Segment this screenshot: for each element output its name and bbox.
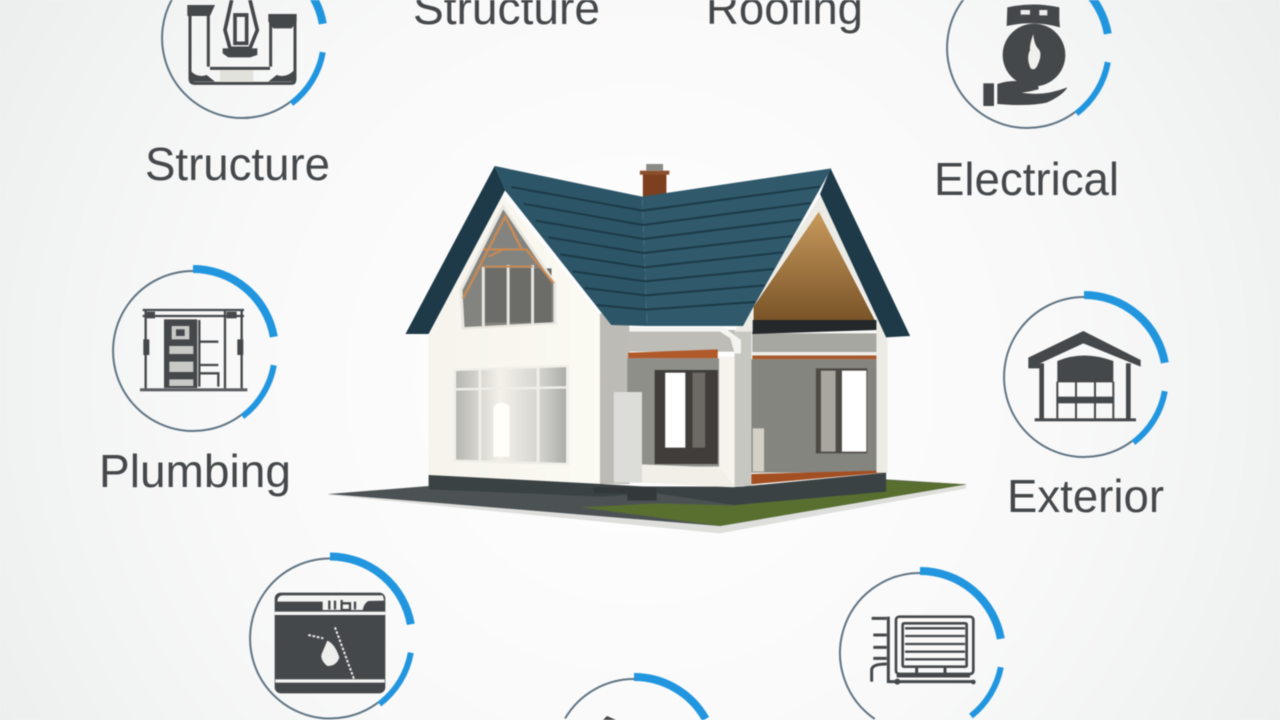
main left facade <box>429 193 601 485</box>
panel: bottom centre <box>565 677 706 720</box>
utility door <box>614 392 642 483</box>
upper window with rafters <box>461 207 555 328</box>
open room floor <box>751 471 884 484</box>
ring: hvac <box>840 571 1001 719</box>
icon: bottom centre fragment <box>603 716 616 720</box>
ring: plumbing <box>113 269 274 431</box>
ring: electrical <box>947 0 1108 128</box>
panel: exterior <box>1004 295 1165 522</box>
icon: screen with drop <box>275 593 385 693</box>
left gable roof edge <box>405 166 505 334</box>
beam and ceiling band <box>752 320 876 359</box>
icon: plumbing cabinet <box>140 310 247 391</box>
panel: electrical <box>934 0 1119 205</box>
gutter and downpipe <box>629 327 741 353</box>
vaulted ceiling <box>754 212 875 320</box>
entry steps <box>594 487 657 501</box>
porch back wall <box>627 358 720 467</box>
right roof plane <box>642 168 831 326</box>
lower porch wall <box>642 464 735 487</box>
icon: hand holding energy <box>983 4 1067 106</box>
label: exterior: Exterior <box>1007 470 1164 522</box>
label: plumbing: Plumbing <box>99 445 291 497</box>
panel: hvac (bottom right) <box>840 571 1001 719</box>
chimney <box>640 164 669 197</box>
icon: structure pipes and figure <box>187 0 297 83</box>
dresser <box>753 428 764 472</box>
icon: house exterior <box>1028 331 1141 421</box>
right gable frame <box>735 195 887 473</box>
label: electrical: Electrical <box>934 153 1119 205</box>
ring: exterior <box>1004 295 1165 457</box>
facade foundation <box>429 475 657 497</box>
porch orange trim <box>628 349 718 358</box>
left roof plane <box>495 166 647 326</box>
ring: structure <box>162 0 323 118</box>
side wall <box>600 313 629 484</box>
panel: plumbing <box>99 269 291 497</box>
panel: interior (bottom left) <box>250 556 411 718</box>
panel: structure <box>145 0 330 190</box>
icon: hvac unit <box>872 617 976 685</box>
ring: interior <box>250 556 411 718</box>
porch ceiling <box>627 330 735 352</box>
base under column <box>657 473 886 505</box>
corner column <box>719 330 751 487</box>
open room window <box>816 368 867 453</box>
right gable roof edge <box>820 168 910 337</box>
ring: bottom centre <box>565 677 706 719</box>
lower window <box>455 366 568 464</box>
open room back wall <box>751 359 877 473</box>
illustration: house <box>328 164 966 533</box>
label: structure: Structure <box>145 138 330 190</box>
porch window <box>655 370 718 464</box>
ground plot <box>328 479 966 533</box>
